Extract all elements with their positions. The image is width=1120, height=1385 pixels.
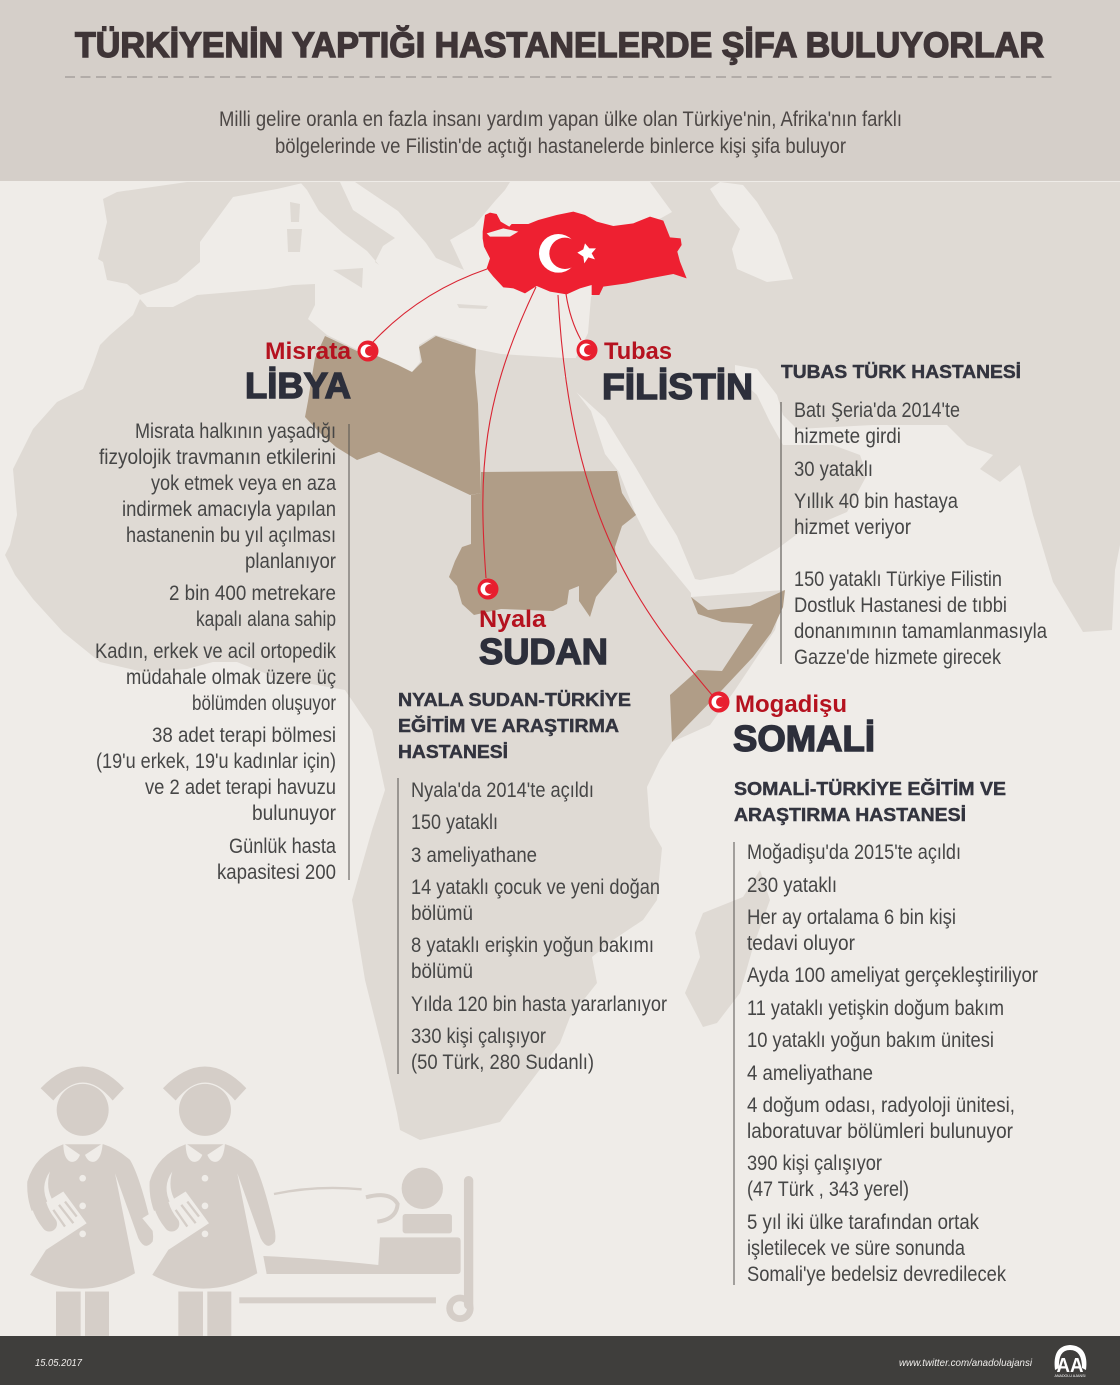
text block: Somalia details — [734, 841, 1038, 1286]
text block: Palestine details: hizmete girdi — [794, 425, 901, 448]
text block: Palestine details: donanımının tamamlanmasıyla — [794, 620, 1047, 643]
text block: Palestine details: 30 yataklı — [794, 458, 873, 481]
flag star — [577, 243, 596, 263]
header band — [0, 0, 1120, 181]
text block: Libya details: (19'u erkek, 19'u kadınlar için) — [96, 750, 336, 773]
text block: Somalia details: 11 yataklı yetişkin doğum bakım — [747, 997, 1004, 1020]
label: Sudan: SUDAN — [479, 631, 608, 672]
map: islands — [287, 202, 488, 309]
text block: Libya details: Günlük hasta — [229, 835, 336, 858]
text block: Palestine details: 150 yataklı Türkiye Filistin — [794, 568, 1002, 591]
map: Sudan highlighted — [449, 471, 636, 617]
text block: Somalia details: Somali'ye bedelsiz devredilecek — [747, 1263, 1006, 1286]
text block: Libya details: fizyolojik travmanın etkilerini — [99, 446, 336, 469]
text block: Sudan details — [398, 778, 667, 1074]
text block: Somalia details: 390 kişi çalışıyor — [747, 1152, 882, 1175]
text block: Sudan details: bölümü — [411, 902, 473, 925]
text block: Somalia details: tedavi oluyor — [747, 932, 855, 955]
marker: Mogadishu — [708, 692, 730, 712]
text block: Palestine details: Batı Şeria'da 2014'te — [794, 399, 960, 422]
footer bar — [0, 1336, 1120, 1385]
label: Somalia: SOMALİ — [733, 718, 875, 759]
label: Libya: LİBYA — [245, 365, 351, 406]
subtitle — [219, 108, 902, 158]
text block: Somalia details: 230 yataklı — [747, 874, 837, 897]
marker: Nyala — [478, 578, 498, 600]
text block: Sudan details: 3 ameliyathane — [411, 844, 537, 867]
marker: Misrata — [358, 340, 378, 362]
icon: patient in hospital bed — [239, 1168, 473, 1319]
text block: Somalia details: (47 Türk , 343 yerel) — [747, 1178, 909, 1201]
text block: Libya details: hastanenin bu yıl açılması — [126, 524, 336, 547]
text block: Sudan details: Nyala'da 2014'te açıldı — [411, 779, 594, 802]
text block: Libya details: 2 bin 400 metrekare — [169, 582, 336, 605]
world map background — [5, 182, 1120, 1140]
text block: Libya details: kapasitesi 200 — [217, 861, 336, 884]
text block: Sudan details: (50 Türk, 280 Sudanlı) — [411, 1051, 594, 1074]
text block: Palestine details: Gazze'de hizmete girecek — [794, 646, 1001, 669]
text block: Libya details: Kadın, erkek ve acil ortopedik — [95, 640, 336, 663]
heading: Nyala hospital: NYALA SUDAN-TÜRKİYE — [398, 689, 631, 710]
text block: Sudan details: 14 yataklı çocuk ve yeni doğan — [411, 876, 660, 899]
map: Balkans — [355, 182, 510, 270]
text block: Sudan details: 150 yataklı — [411, 811, 498, 834]
text block: Somalia details: işletilecek ve süre sonunda — [747, 1237, 965, 1260]
marker: Tubas — [576, 340, 598, 360]
text block: Somalia details: Her ay ortalama 6 bin kişi — [747, 906, 956, 929]
heading: Somalia hospital — [734, 778, 1006, 825]
text block: Libya details: planlanıyor — [245, 550, 336, 573]
text block: Libya details: indirmek amacıyla yapılan — [122, 498, 336, 521]
text block: Libya details: yok etmek veya en aza — [151, 472, 336, 495]
heading: Nyala hospital — [398, 689, 631, 762]
label: Palestine — [602, 338, 753, 407]
flag crescent — [539, 234, 578, 273]
text block: Somalia details: 5 yıl iki ülke tarafından ortak — [747, 1211, 979, 1234]
text block: Libya details: Misrata halkının yaşadığı — [135, 420, 336, 443]
text block: Libya details: kapalı alana sahip — [196, 608, 336, 631]
map: Africa — [5, 284, 784, 1140]
text block: Palestine details: hizmet veriyor — [794, 516, 911, 539]
title: TÜRKİYENİN YAPTIĞI HASTANELERDE ŞİFA BULUYORLAR — [75, 25, 1044, 65]
route lines from Turkey — [373, 269, 712, 695]
text block: Somalia details: 4 ameliyathane — [747, 1062, 873, 1085]
text block: Sudan details: Yılda 120 bin hasta yararlanıyor — [411, 993, 667, 1016]
map: Turkey with flag symbol — [483, 212, 687, 295]
subtitle: Milli gelire oranla en fazla insanı yardım yapan ülke olan Türkiye'nin, Afrika'nın farklı — [219, 108, 902, 131]
heading: Somalia hospital: ARAŞTIRMA HASTANESİ — [734, 804, 966, 825]
text block: Somalia details: Moğadişu'da 2015'te açıldı — [747, 841, 961, 864]
text block: Somalia details: 4 doğum odası, radyoloji ünitesi, — [747, 1094, 1015, 1117]
text block: Libya details: bulunuyor — [252, 802, 336, 825]
text block: Palestine details — [781, 399, 1047, 669]
label: Somalia — [733, 691, 875, 759]
text block: Sudan details: 8 yataklı erişkin yoğun bakımı — [411, 934, 654, 957]
text block: Libya details: ve 2 adet terapi havuzu — [145, 776, 336, 799]
map: Madagascar — [685, 870, 770, 1027]
map: Libya highlighted — [305, 336, 481, 495]
map: Asia and Middle East — [566, 182, 1120, 632]
map: Caspian Sea — [710, 182, 793, 282]
heading: Nyala hospital: EĞİTİM VE ARAŞTIRMA — [398, 715, 619, 736]
map: Somalia highlighted — [670, 590, 785, 742]
text block: Libya details: müdahale olmak üzere üç — [126, 666, 336, 689]
label: Palestine: FİLİSTİN — [602, 366, 753, 407]
label: Libya: Misrata — [265, 338, 352, 365]
footer social link: www.twitter.com/anadoluajansi — [899, 1357, 1033, 1369]
label: Somalia: Mogadişu — [735, 691, 847, 718]
text block: Sudan details: bölümü — [411, 960, 473, 983]
label: Libya — [245, 338, 352, 406]
text block: Palestine details: Dostluk Hastanesi de tıbbi — [794, 594, 1007, 617]
text block: Libya details: bölümden oluşuyor — [192, 692, 336, 715]
subtitle: bölgelerinde ve Filistin'de açtığı hastanelerde binlerce kişi şifa buluyor — [275, 135, 846, 158]
map: Iberia and France — [98, 182, 307, 295]
label: Sudan — [479, 606, 608, 672]
text block: Libya details — [95, 420, 349, 884]
footer date: 15.05.2017 — [35, 1358, 82, 1369]
heading: Nyala hospital: HASTANESİ — [398, 741, 508, 762]
text block: Libya details: 38 adet terapi bölmesi — [152, 724, 336, 747]
label: Palestine: Tubas — [604, 338, 672, 365]
text block: Sudan details: 330 kişi çalışıyor — [411, 1025, 546, 1048]
icon: two nurses — [20, 1067, 275, 1336]
text block: Palestine details: Yıllık 40 bin hastaya — [794, 490, 958, 513]
logo: Anadolu Agency: ANADOLU AJANSI — [1054, 1374, 1086, 1378]
map: Italy — [300, 182, 395, 265]
heading: Tubas hospital: TUBAS TÜRK HASTANESİ — [781, 361, 1021, 382]
heading: Somalia hospital: SOMALİ-TÜRKİYE EĞİTİM VE — [734, 778, 1006, 799]
label: Sudan: Nyala — [479, 606, 547, 633]
logo: Anadolu Agency: AA — [1056, 1355, 1084, 1377]
text block: Somalia details: laboratuvar bölümleri bulunuyor — [747, 1120, 1013, 1143]
text block: Somalia details: 10 yataklı yoğun bakım ünitesi — [747, 1029, 994, 1052]
logo: Anadolu Agency — [1054, 1345, 1086, 1378]
text block: Somalia details: Ayda 100 ameliyat gerçekleştiriliyor — [747, 964, 1038, 987]
